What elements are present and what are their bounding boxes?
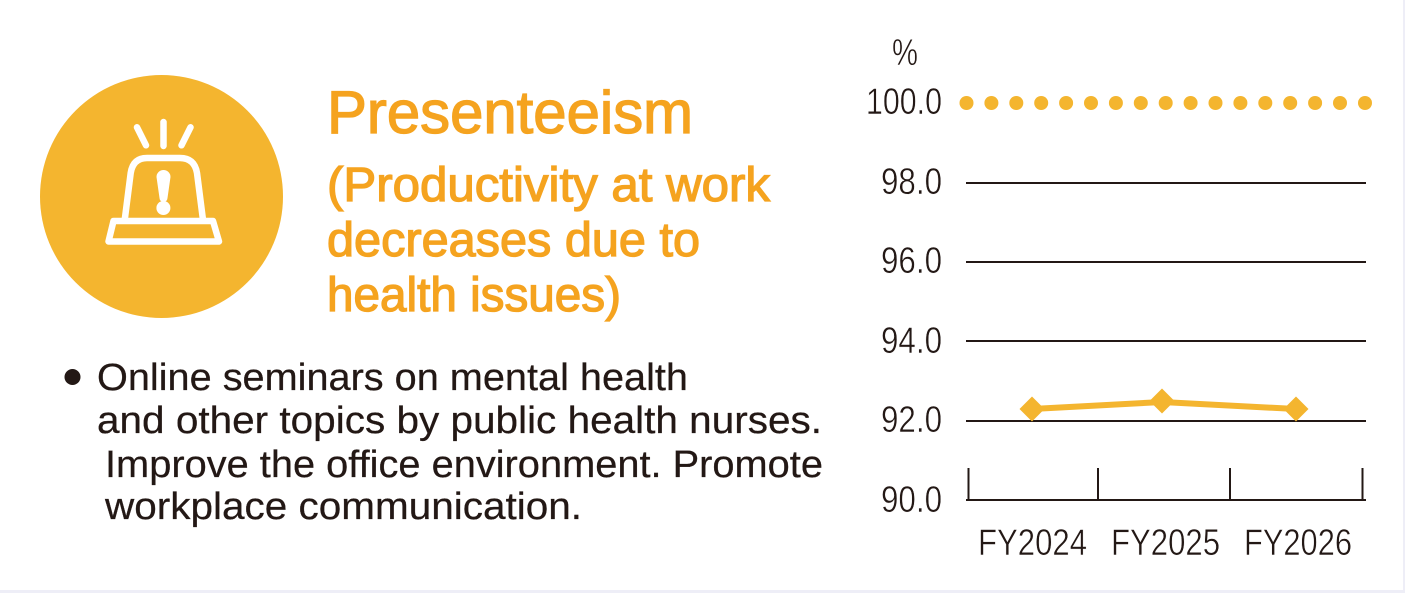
bullet text: measures: workplace communication. <box>104 486 582 528</box>
bullet text: measures: Online seminars on mental health <box>97 357 688 399</box>
y axis labels: 90.0 <box>881 479 942 520</box>
y axis labels: 98.0 <box>881 161 942 202</box>
x axis labels: FY2026 <box>1244 522 1352 563</box>
y axis labels: 100.0 <box>866 81 942 122</box>
heading: Presenteeism: Presenteeism <box>327 79 693 146</box>
x axis labels: FY2025 <box>1111 522 1220 563</box>
bullet text: measures: and other topics by public health nurses. <box>97 400 822 442</box>
x axis labels <box>978 522 1352 563</box>
x axis labels: FY2024 <box>978 522 1087 563</box>
data line with diamond markers <box>1020 388 1308 422</box>
target dotted line at 100 <box>960 96 1372 110</box>
icon: alert siren in circle <box>40 75 283 318</box>
y axis labels: 94.0 <box>881 320 942 361</box>
y axis labels <box>866 32 942 520</box>
subheading: productivity explanation: (Productivity at work <box>327 159 771 212</box>
bullet text: measures <box>64 357 823 528</box>
line chart: presenteeism FY2024-FY2026 <box>866 32 1372 563</box>
y axis labels: 92.0 <box>881 399 942 440</box>
bullet text: measures: Improve the office environment. Promote <box>105 444 823 486</box>
y axis labels: 96.0 <box>881 240 942 281</box>
subheading: productivity explanation: decreases due to <box>327 214 700 267</box>
y axis labels: % <box>892 32 918 73</box>
subheading: productivity explanation: health issues) <box>327 269 621 322</box>
subheading: productivity explanation <box>327 159 771 322</box>
